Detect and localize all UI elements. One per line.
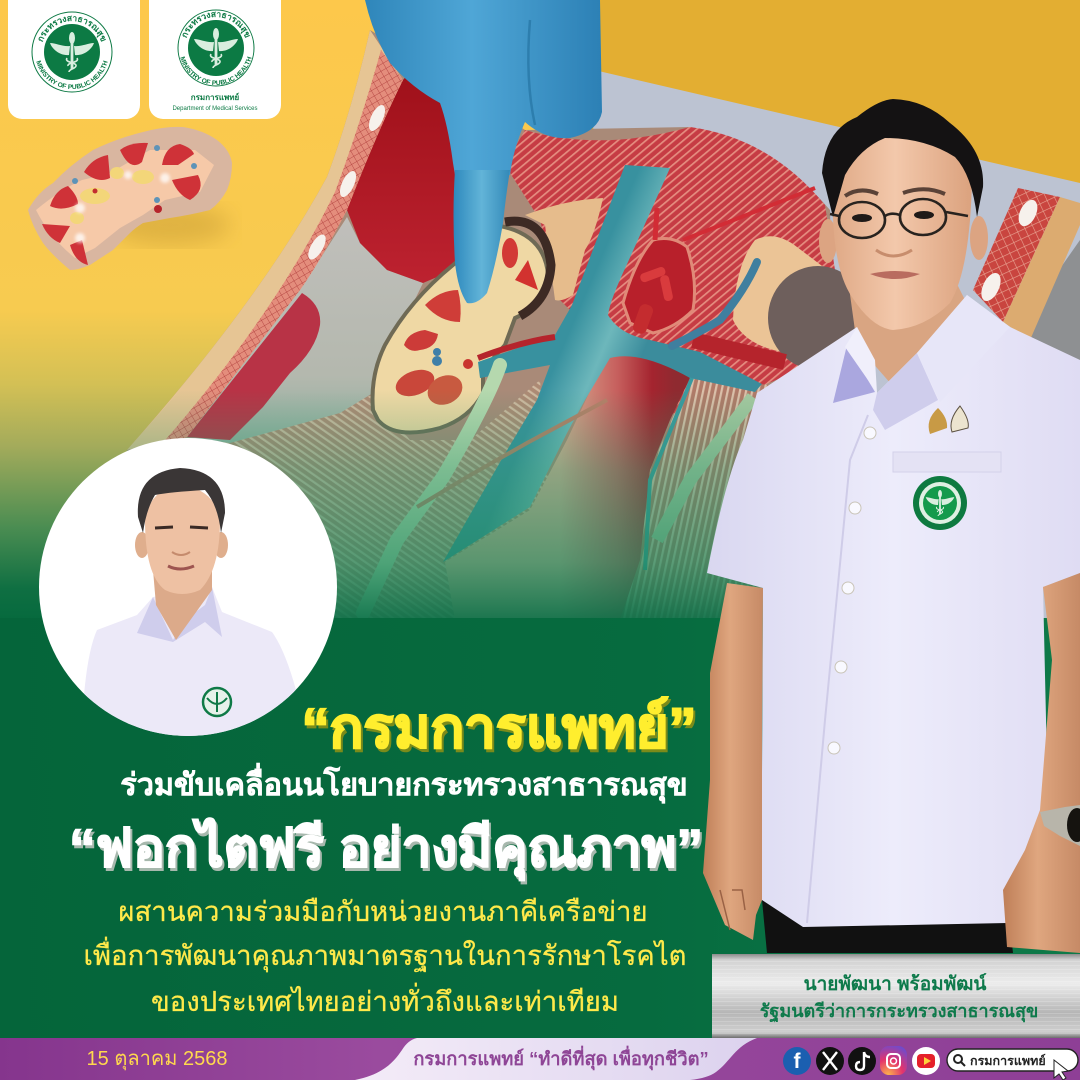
slice outline bbox=[28, 127, 232, 270]
under collar right bbox=[873, 353, 938, 430]
ear left bbox=[819, 219, 837, 263]
red vessel top bbox=[683, 188, 815, 240]
darker yellow backdrop top right bbox=[590, 0, 1080, 200]
kidney bbox=[372, 226, 548, 432]
portrait shirt bbox=[84, 588, 296, 736]
thin brown vessel bbox=[417, 400, 607, 507]
red upper muscle bbox=[505, 127, 835, 420]
right iliac artery bbox=[693, 340, 785, 362]
kidney slice model bbox=[28, 127, 232, 270]
wall tan layer bbox=[127, 30, 403, 450]
strip ovals bbox=[977, 197, 1041, 304]
portrait ear left bbox=[135, 532, 148, 558]
slice vessels bbox=[72, 145, 197, 213]
pocket bbox=[893, 452, 1001, 472]
footer bar bbox=[0, 1038, 1080, 1080]
dark renal rim bbox=[505, 221, 551, 316]
glove hand bbox=[365, 0, 602, 175]
icon: facebook: f bbox=[794, 1050, 802, 1073]
strip cells bbox=[973, 188, 1060, 322]
pin gold bbox=[929, 408, 947, 434]
nose bbox=[876, 250, 912, 256]
circular portrait bbox=[39, 438, 337, 760]
minister portrait bbox=[703, 99, 1080, 953]
adrenal artery knot bbox=[623, 239, 695, 335]
right striped tissue bbox=[615, 378, 770, 620]
portrait badge bbox=[203, 688, 231, 716]
collar left bbox=[845, 327, 877, 393]
dark red cavity bbox=[347, 60, 475, 283]
red stub top bbox=[655, 208, 657, 240]
watch bbox=[1040, 805, 1080, 846]
tan organ right bbox=[733, 236, 838, 352]
strip shadow bbox=[1010, 240, 1080, 380]
buttons bbox=[828, 427, 876, 754]
icon: facebook bbox=[783, 1047, 811, 1075]
icon: youtube bbox=[912, 1047, 940, 1075]
glove fold bbox=[528, 20, 535, 125]
grey inner wall bbox=[187, 217, 423, 443]
shirt bbox=[707, 295, 1080, 927]
department English name: Department of Medical Services bbox=[172, 106, 258, 112]
search box bbox=[947, 1049, 1078, 1071]
renal artery bbox=[478, 337, 555, 358]
anatomical model photo bbox=[100, 30, 868, 620]
blue vein branch bbox=[672, 262, 757, 346]
wall cell layer bbox=[160, 50, 403, 446]
brushed texture bbox=[712, 958, 1080, 1034]
base of model bbox=[127, 30, 840, 620]
eyes bbox=[852, 211, 934, 222]
body text bbox=[83, 896, 687, 1017]
background gradient bbox=[0, 0, 1080, 620]
headline: free dialysis: “ฟอกไตฟรี อย่างมีคุณภาพ” bbox=[69, 817, 703, 881]
green lower panel bbox=[0, 618, 1080, 1038]
mouth bbox=[870, 271, 920, 279]
logo card: Department of Medical Services bbox=[149, 0, 281, 119]
slogan ribbon bbox=[355, 1038, 757, 1080]
under collar left bbox=[833, 345, 875, 403]
icon: cursor bbox=[1054, 1060, 1068, 1080]
left arm bbox=[703, 583, 763, 940]
hair bbox=[822, 99, 983, 217]
icon: instagram bbox=[880, 1046, 907, 1075]
portrait hair bbox=[138, 468, 225, 533]
steel plate bbox=[712, 954, 1080, 1038]
placket bbox=[807, 415, 868, 923]
seal: กระทรวงสาธารณสุข bbox=[182, 12, 250, 38]
slice pyramids bbox=[42, 143, 201, 265]
portrait mouth bbox=[168, 566, 194, 569]
wall label ovals bbox=[305, 103, 388, 262]
seal: กระทรวงสาธารณสุข bbox=[38, 16, 106, 42]
slice shadow bbox=[110, 205, 230, 245]
seal bbox=[32, 12, 112, 92]
slogan: กรมการแพทย์ “ทำดีที่สุด เพื่อทุกชีวิต” bbox=[413, 1045, 709, 1071]
left striped tissue bbox=[200, 380, 560, 620]
eyebrows bbox=[845, 189, 945, 196]
icon: X bbox=[816, 1047, 844, 1075]
portrait collar inner bbox=[137, 587, 222, 642]
slice inner bbox=[36, 150, 214, 258]
neck bbox=[848, 280, 965, 400]
seal: MINISTRY OF PUBLIC HEALTH bbox=[180, 56, 252, 85]
fingers left bbox=[720, 890, 745, 930]
shirt badge bbox=[913, 476, 967, 530]
portrait face bbox=[145, 485, 220, 594]
body text: ของประเทศไทยอย่างทั่วถึงและเท่าเทียม bbox=[151, 983, 619, 1017]
portrait nose bbox=[172, 552, 190, 555]
glove finger bbox=[454, 170, 510, 303]
face bbox=[833, 128, 972, 330]
grey-brown dome bbox=[768, 266, 868, 370]
icon: tiktok bbox=[848, 1047, 876, 1075]
right arm bbox=[1003, 573, 1080, 953]
pale grey card behind model bbox=[590, 69, 1080, 620]
ureter right bbox=[657, 397, 753, 540]
department Thai name: กรมการแพทย์ bbox=[191, 92, 240, 102]
glove bbox=[365, 0, 602, 303]
ear right bbox=[970, 216, 988, 260]
subhead: ร่วมขับเคลื่อนนโยบายกระทรวงสาธารณสุข bbox=[120, 763, 688, 804]
portrait neck bbox=[153, 565, 212, 640]
slice pelvis highlight bbox=[75, 171, 170, 243]
photo fade to green bbox=[100, 390, 840, 620]
seal bbox=[178, 10, 254, 86]
minister title: รัฐมนตรีว่าการกระทรวงสาธารณสุข bbox=[760, 1001, 1038, 1023]
date: 15 ตุลาคม 2568 bbox=[87, 1048, 227, 1071]
name plate bbox=[712, 954, 1080, 1038]
logo card: Ministry of Public Health bbox=[8, 0, 140, 119]
headline: department: “กรมการแพทย์” bbox=[301, 696, 697, 759]
minister name: นายพัฒนา พร้อมพัฒน์ bbox=[804, 973, 987, 995]
ureter left bbox=[363, 365, 500, 613]
adrenal tan lump bbox=[525, 198, 603, 300]
seal: MINISTRY OF PUBLIC HEALTH bbox=[36, 60, 108, 89]
pin silver bbox=[951, 406, 968, 432]
portrait eyes bbox=[155, 527, 208, 528]
red patch lower bbox=[187, 293, 320, 440]
strip tan face bbox=[1003, 197, 1080, 340]
aorta bbox=[445, 353, 690, 620]
body text: เพื่อการพัฒนาคุณภาพมาตรฐานในการรักษาโรคไต bbox=[83, 937, 687, 973]
vena cava bbox=[443, 165, 762, 562]
body text: ผสานความร่วมมือกับหน่วยงานภาคีเครือข่าย bbox=[118, 896, 648, 927]
search box: กรมการแพทย์ bbox=[970, 1053, 1046, 1068]
lower thin vein bbox=[645, 378, 692, 570]
wall strip far right bbox=[973, 188, 1080, 380]
collar right bbox=[917, 295, 1010, 402]
slice calyces bbox=[70, 167, 154, 224]
glasses bbox=[830, 199, 968, 238]
portrait ear right bbox=[216, 532, 228, 558]
trousers bbox=[762, 900, 1013, 953]
